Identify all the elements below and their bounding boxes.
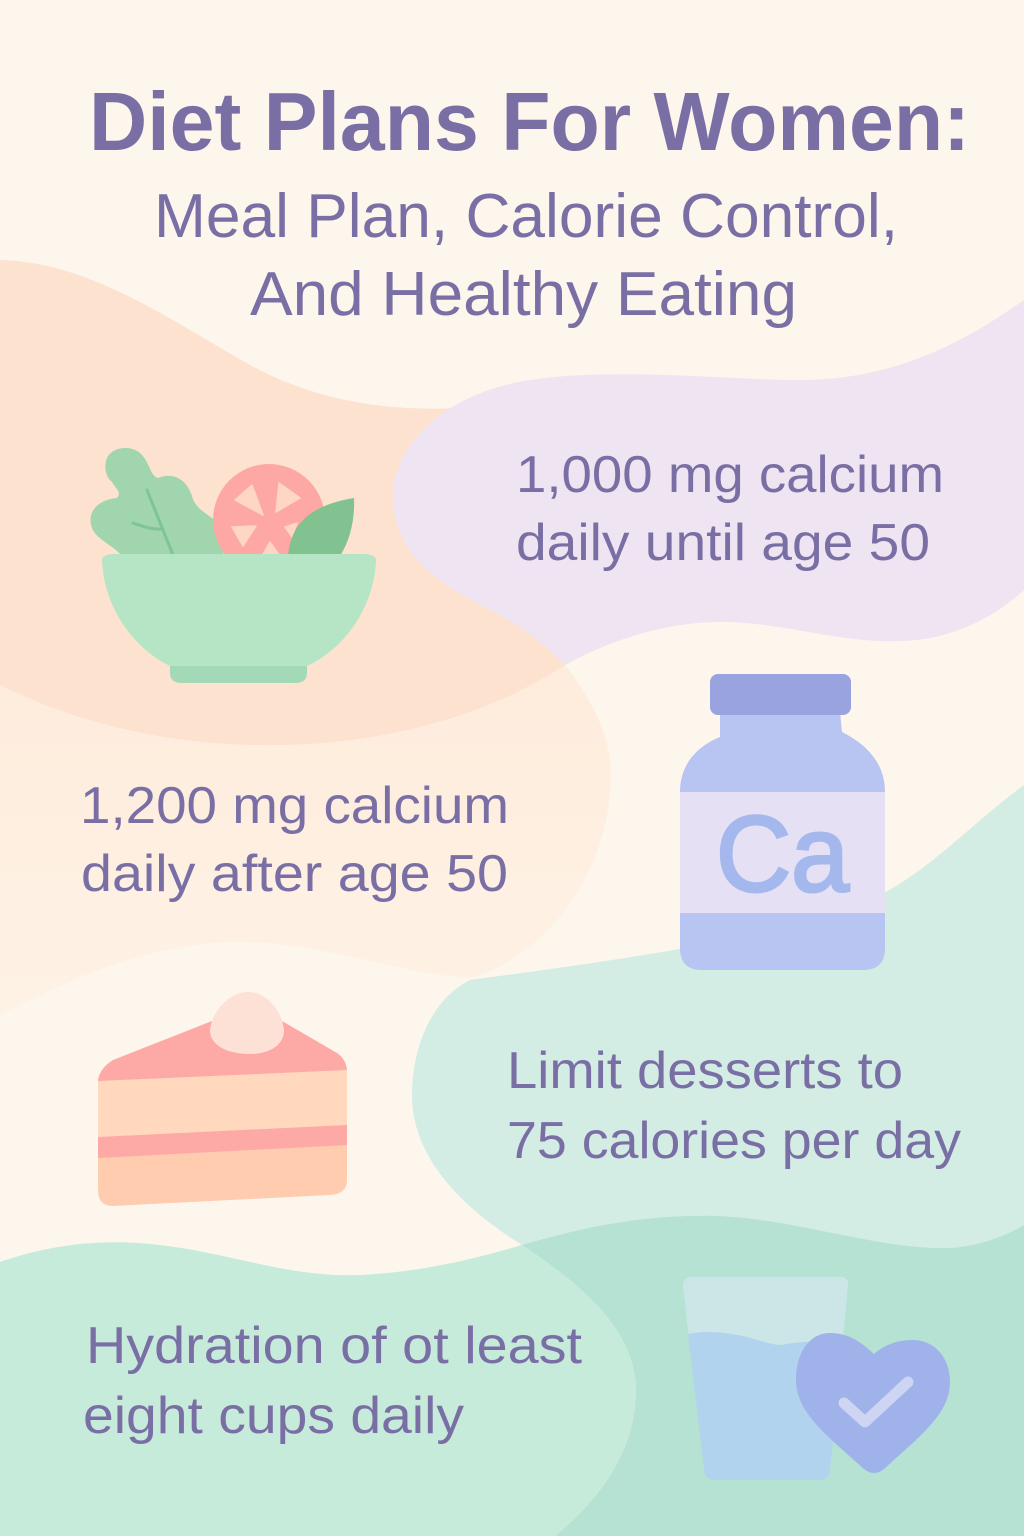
icon: cake slice <box>98 992 347 1206</box>
text: 1,000 mg calcium: 1,000 mg calcium <box>516 446 944 504</box>
label text Ca: Ca <box>716 793 850 914</box>
glass <box>683 1277 848 1480</box>
water <box>688 1332 844 1480</box>
cake filling stripe <box>98 1125 347 1158</box>
bottle label <box>680 792 885 913</box>
background blob: bottom right teal <box>522 1216 1024 1536</box>
cake upper layer <box>98 1070 347 1138</box>
text: 1,200 mg calcium: daily after age 50 <box>81 845 508 903</box>
cake top frosting <box>98 1021 347 1082</box>
bowl base <box>170 666 307 683</box>
tomato slice <box>213 464 325 576</box>
text: limit desserts: Limit desserts to <box>507 1042 903 1100</box>
text: limit desserts <box>507 1042 961 1170</box>
cake lower layer <box>98 1144 347 1206</box>
background blob: bottom green <box>0 1242 636 1536</box>
title: Diet Plans For Women: <box>89 75 970 168</box>
heart <box>796 1333 950 1473</box>
leaf veins <box>133 490 173 555</box>
icon: water glass with heart check <box>683 1277 950 1480</box>
whipped cream <box>210 992 284 1054</box>
bottle body <box>680 712 885 970</box>
text: 1,000 mg calcium: daily until age 50 <box>516 514 930 572</box>
background blob: cream band <box>0 665 611 1015</box>
icon: calcium supplement bottle <box>680 674 885 970</box>
text: hydration: Hydration of ot least <box>86 1317 583 1375</box>
subtitle <box>154 182 898 329</box>
subtitle: And Healthy Eating <box>250 260 797 329</box>
background blob: lavender <box>393 300 1024 665</box>
bowl <box>102 554 376 666</box>
check mark <box>844 1382 908 1422</box>
text: hydration <box>83 1317 583 1445</box>
text: 1,000 mg calcium <box>516 446 944 572</box>
background blob: peach <box>0 260 565 745</box>
text: hydration: eight cups daily <box>83 1387 464 1445</box>
background blob: light green <box>412 785 1024 1248</box>
subtitle: Meal Plan, Calorie Control, <box>154 182 898 251</box>
bottle cap <box>710 674 851 715</box>
lettuce leaf <box>91 448 225 556</box>
text: 1,200 mg calcium: 1,200 mg calcium <box>80 777 509 835</box>
text: 1,200 mg calcium <box>80 777 509 903</box>
icon: salad bowl <box>91 448 376 683</box>
green leaf <box>288 498 354 556</box>
text: limit desserts: 75 calories per day <box>507 1112 961 1170</box>
